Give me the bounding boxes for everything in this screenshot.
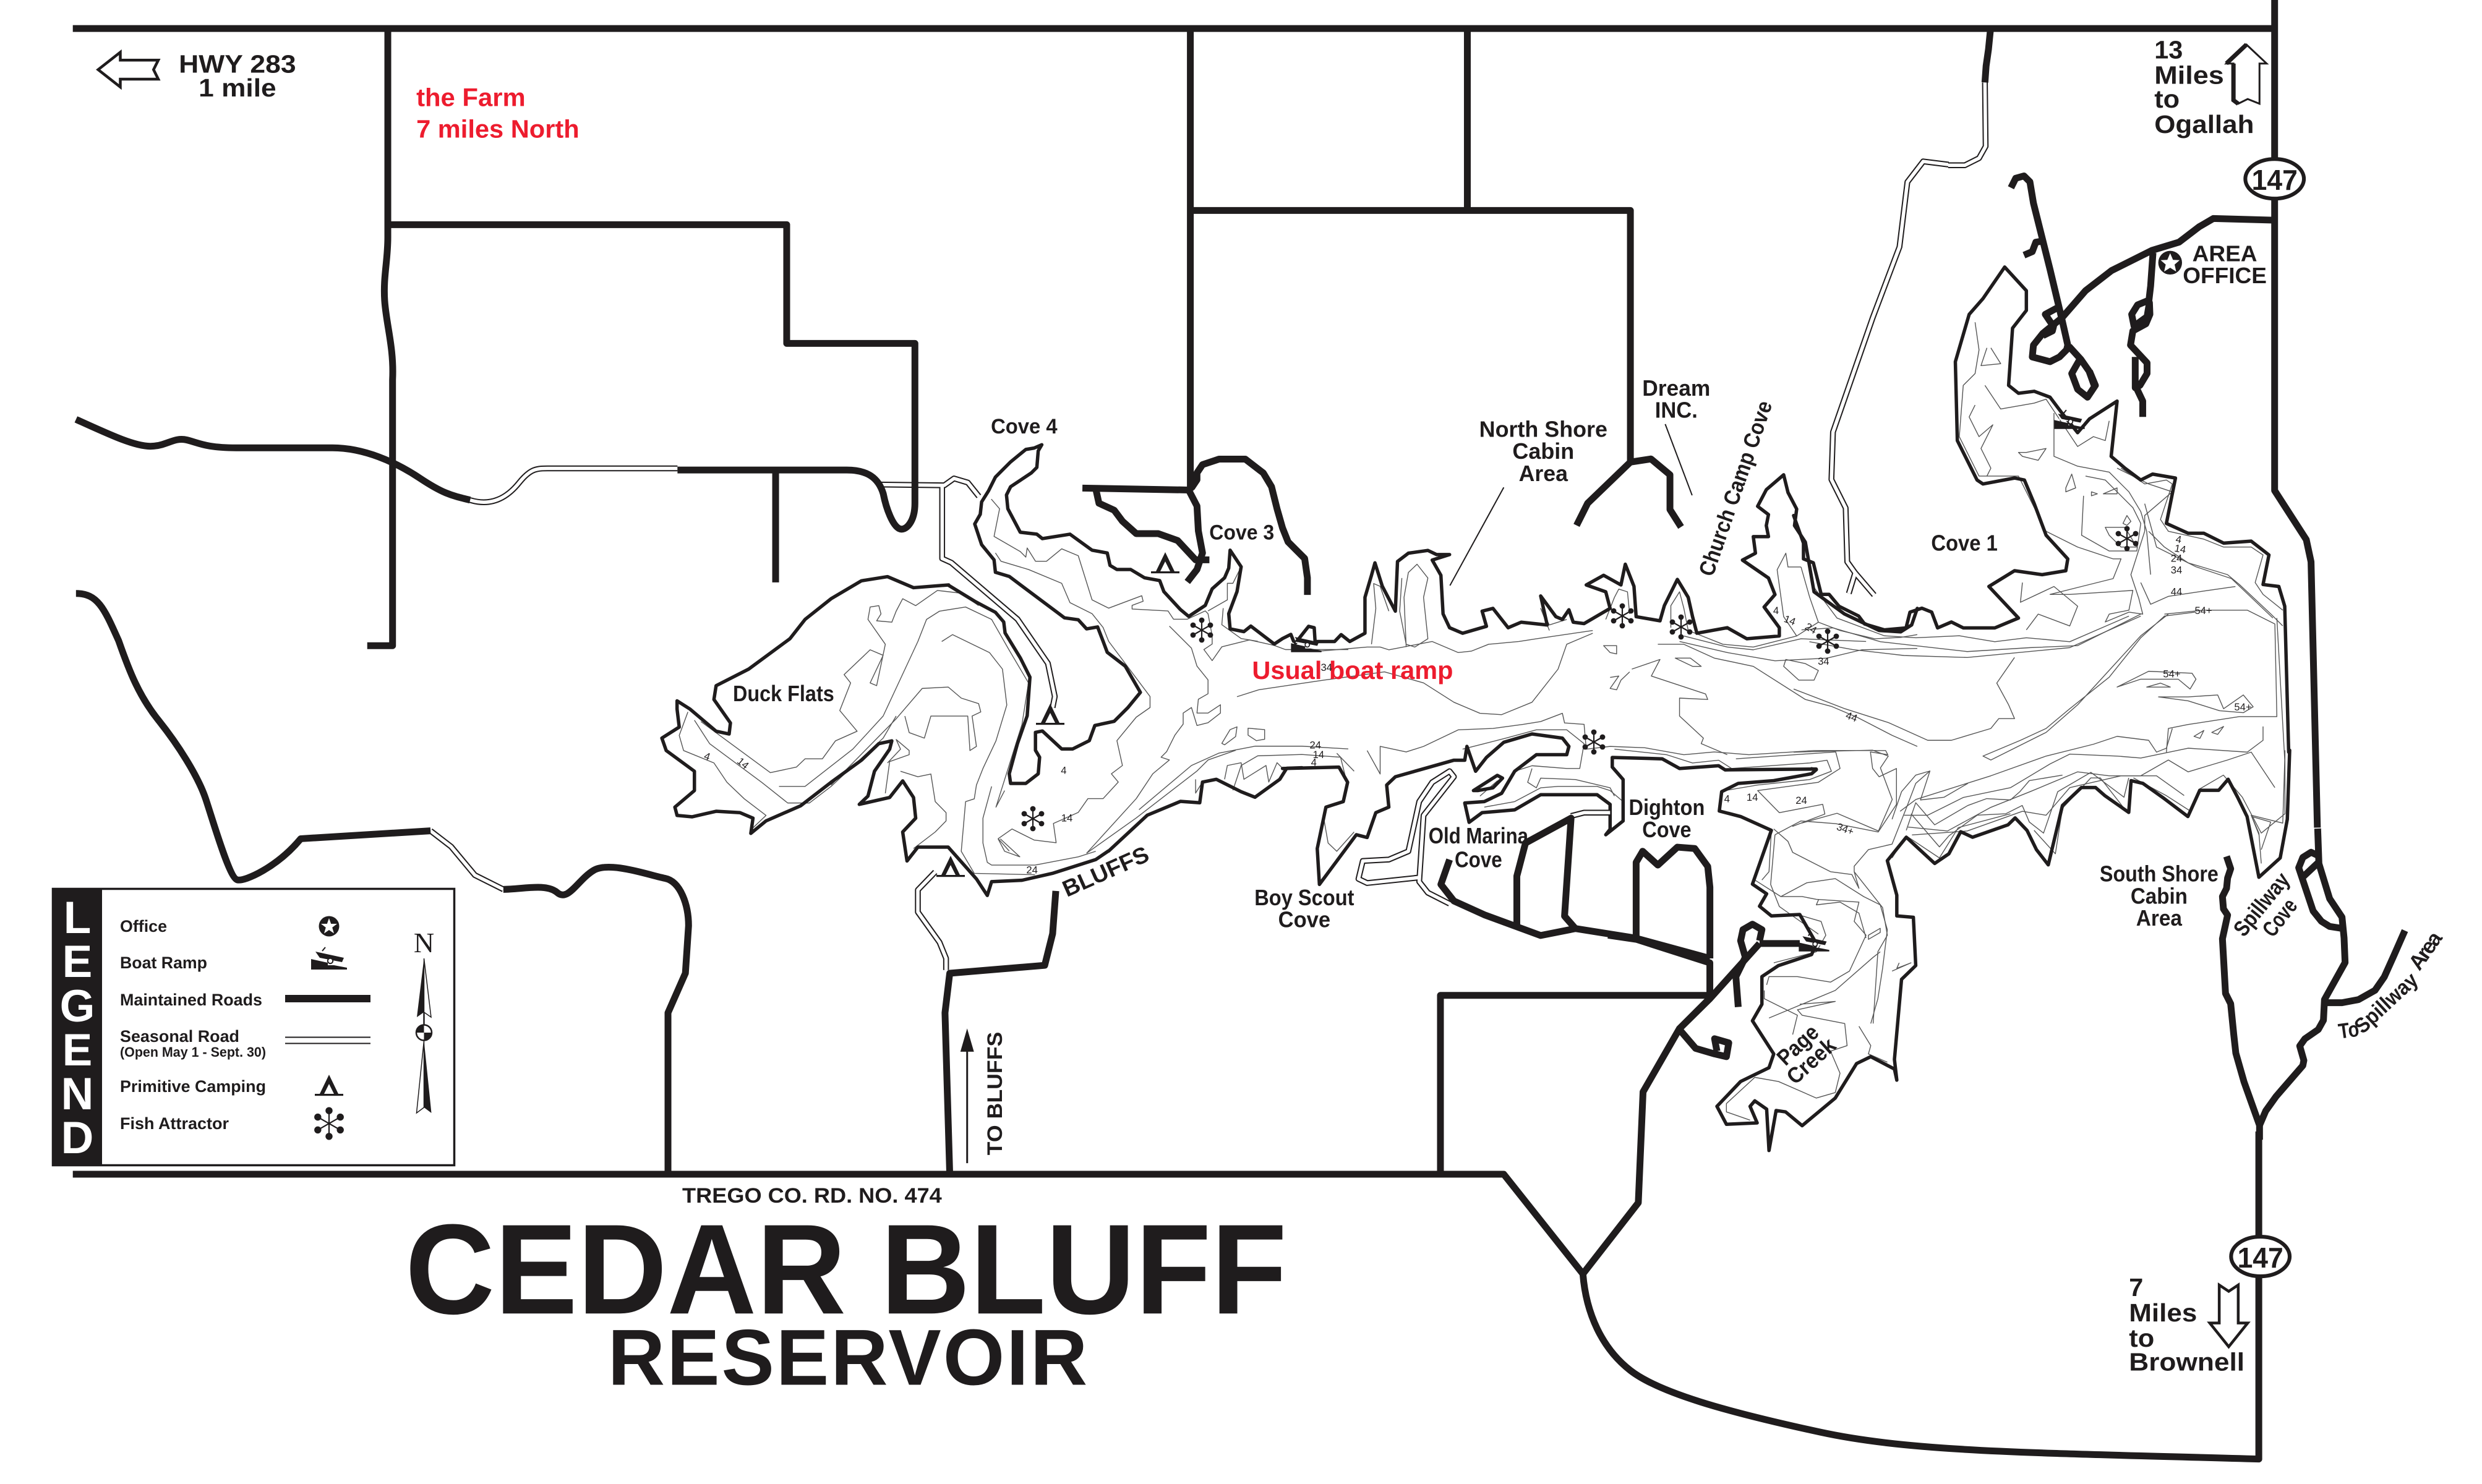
- seasonal roads: western: [430, 161, 1948, 889]
- roads: area office: [1985, 30, 2274, 388]
- depth contours: central basin: [1237, 553, 1917, 934]
- label: South Shore Cabin Area: Area: [2136, 906, 2183, 931]
- depth soundings: 24: [1310, 740, 1321, 751]
- legend heading column: [52, 888, 102, 1166]
- legend: fish attractor: Fish Attractor: [120, 1114, 229, 1133]
- depth soundings: 24: [1795, 795, 1807, 806]
- label: area office: AREA: [2193, 241, 2257, 266]
- depth soundings: 54+: [2163, 668, 2180, 680]
- depth contours: Page Creek and south shore: [1726, 750, 2285, 1120]
- highway sign: 147 south: [2231, 1237, 2290, 1276]
- shoreline: Cove 3, Cove 4 and Duck Flats inner arm: [949, 445, 1302, 851]
- shoreline: Cove 1 and dam: [1794, 267, 2288, 752]
- label: Dighton Cove: [1629, 795, 1705, 842]
- label: Boy Scout Cove: Cove: [1278, 908, 1330, 932]
- label: To Spillway Area: [2337, 927, 2447, 1044]
- legend heading column: D: [61, 1113, 93, 1163]
- label: HWY 283: HWY 283: [179, 50, 296, 79]
- legend: seasonal road: (Open May 1 - Sept. 30): [120, 1044, 266, 1060]
- north arrow: [414, 927, 434, 1113]
- label: HWY 283: 1 mile: [199, 74, 276, 102]
- legend: boat ramp: Boat Ramp: [120, 953, 207, 972]
- highway sign: 147 south: 147: [2238, 1242, 2283, 1274]
- note: the Farm: 7 miles North: [416, 115, 580, 143]
- seasonal road: north of Ogallah road: [1948, 82, 1985, 165]
- label: Spillway Cove: Spillway: [2228, 868, 2295, 941]
- label: South Shore Cabin Area: South Shore: [2100, 862, 2219, 887]
- depth soundings: 4: [1311, 757, 1317, 769]
- lake shoreline: [662, 267, 2290, 1151]
- leader: Dream Inc.: [1665, 424, 1692, 495]
- depth soundings: [703, 533, 2252, 876]
- label: Dream Inc.: INC.: [1655, 398, 1698, 423]
- label: Dream Inc.: [1642, 376, 1710, 423]
- legend: maintained roads: Maintained Roads: [120, 991, 262, 1009]
- depth soundings: 44: [1844, 709, 1859, 724]
- label: Old Marina Cove: [1429, 824, 1529, 872]
- note: the Farm: the Farm: [416, 83, 526, 111]
- label: 13 miles to Ogallah: Miles: [2154, 61, 2224, 90]
- depth soundings: 4: [703, 750, 712, 763]
- label: area office: [2183, 241, 2267, 288]
- depth soundings: 24: [1026, 864, 1038, 876]
- arrow: HWY 283: [98, 52, 158, 87]
- primitive camping icons: [936, 552, 1179, 877]
- note: usual boat ramp: Usual boat ramp: [1252, 656, 1453, 684]
- depth contours: east basin and Cove 1: [1794, 322, 2285, 835]
- label: HWY 283: [179, 50, 296, 102]
- roads: Page Creek: [1608, 924, 1800, 1057]
- boat ramp icons: [1291, 410, 2085, 952]
- legend heading column: E: [62, 937, 92, 987]
- label: Duck Flats: Duck Flats: [733, 681, 834, 706]
- label: area office: OFFICE: [2183, 263, 2267, 288]
- legend: office: [120, 916, 339, 936]
- label: 7 miles to Brownell: 7: [2129, 1273, 2143, 1302]
- note: the Farm: [416, 83, 580, 143]
- legend: seasonal road: Seasonal Road: [120, 1027, 239, 1046]
- depth soundings: 14: [1782, 613, 1797, 628]
- seasonal roads: Boy Scout loop: [1358, 771, 1610, 904]
- depth soundings: 14: [1061, 812, 1072, 824]
- depth soundings: 54+: [2234, 701, 2252, 713]
- legend: primitive camping: [120, 1075, 343, 1096]
- label: to Bluffs: TO BLUFFS: [983, 1032, 1007, 1155]
- label: 7 miles to Brownell: to: [2129, 1324, 2154, 1352]
- fish attractors: [1022, 526, 2138, 831]
- icon: area office star: [2159, 251, 2182, 275]
- label: Cove 3: Cove 3: [1209, 521, 1274, 545]
- legend: seasonal road: [120, 1027, 370, 1060]
- arrow: north to Ogallah: [2227, 45, 2267, 104]
- label: North Shore Cabin Area: North Shore: [1479, 417, 1607, 441]
- label: Page Creek: Page: [1772, 1020, 1823, 1070]
- label: 7 miles to Brownell: Miles: [2129, 1298, 2197, 1327]
- seasonal roads: [430, 82, 1985, 970]
- label: 13 miles to Ogallah: [2154, 36, 2254, 139]
- label: 13 miles to Ogallah: 13: [2154, 36, 2183, 64]
- depth soundings: 14: [1313, 749, 1324, 761]
- depth soundings: 24: [1803, 621, 1819, 636]
- north arrow: N: [414, 927, 434, 958]
- label: Old Marina Cove: Cove: [1455, 847, 1502, 872]
- legend heading column: E: [62, 1025, 92, 1075]
- label: Spillway Cove: Cove: [2257, 894, 2302, 942]
- title: Cedar Bluff: CEDAR BLUFF: [405, 1197, 1287, 1341]
- label: Dighton Cove: Dighton: [1629, 795, 1705, 820]
- label: South Shore Cabin Area: [2100, 862, 2219, 931]
- legend: primitive camping: Primitive Camping: [120, 1077, 266, 1096]
- shoreline: south shore and Page Creek: [1717, 750, 2290, 1151]
- label: North Shore Cabin Area: [1479, 417, 1607, 486]
- legend: maintained roads: [120, 991, 370, 1009]
- arrow: south to Brownell: [2210, 1285, 2248, 1347]
- legend heading column: N: [61, 1069, 93, 1119]
- label: Page Creek: Creek: [1782, 1033, 1841, 1090]
- label: Church Camp Cove: Church Camp Cove: [1694, 398, 1777, 579]
- roads: area office lower loop: [2072, 360, 2142, 417]
- label: 7 miles to Brownell: Brownell: [2129, 1347, 2244, 1376]
- highway sign: 147 north: 147: [2252, 164, 2298, 196]
- label: To Spillway Area: Area: [2404, 927, 2447, 974]
- label: Trego Co. Rd. No. 474: TREGO CO. RD. NO. 474: [682, 1184, 943, 1208]
- legend panel: [52, 888, 454, 1166]
- legend: fish attractor: [120, 1107, 344, 1140]
- depth soundings: 44: [2171, 586, 2182, 597]
- label: Dighton Cove: Cove: [1642, 817, 1692, 842]
- depth contours: west basin: [679, 591, 1096, 875]
- depth soundings: 34: [2171, 565, 2182, 576]
- depth soundings: 34+: [1835, 821, 1855, 838]
- roads: Cove 3 area: [1082, 459, 1307, 595]
- highway sign: 147 north: [2245, 159, 2304, 198]
- roads: Old Marina and Dighton: [1441, 818, 1710, 958]
- label: Bluffs: BLUFFS: [1058, 841, 1153, 902]
- shoreline: north shore and south coves: [1283, 475, 1917, 884]
- legend: boat ramp: [120, 947, 347, 972]
- label: North Shore Cabin Area: Cabin: [1512, 439, 1574, 464]
- label: 13 miles to Ogallah: to: [2154, 85, 2180, 113]
- seasonal road: Duck Flats and Cove 4: [879, 479, 1055, 707]
- roads: Highway 147 south and spillway: [2222, 829, 2405, 1140]
- depth soundings: 4: [2175, 533, 2183, 546]
- seasonal roads: Bluffs spur: [918, 872, 946, 970]
- subtitle: Reservoir: RESERVOIR: [608, 1313, 1087, 1402]
- depth soundings: 4: [1724, 793, 1730, 805]
- label: 7 miles to Brownell: [2129, 1273, 2244, 1376]
- label: South Shore Cabin Area: Cabin: [2131, 884, 2188, 908]
- depth contours: Cove 3 and Cove 4 approach: [991, 499, 1348, 853]
- label: To Spillway Area: Spillway: [2350, 968, 2423, 1038]
- depth soundings: 34: [1320, 662, 1332, 673]
- label: Old Marina Cove: Old Marina: [1429, 824, 1529, 848]
- label: 13 miles to Ogallah: Ogallah: [2154, 110, 2254, 139]
- depth soundings: 14: [735, 755, 751, 772]
- depth soundings: 24: [2171, 553, 2182, 565]
- depth soundings: 34: [1818, 655, 1829, 667]
- label: Boy Scout Cove: [1254, 885, 1354, 932]
- legend heading column: L: [64, 893, 91, 943]
- leader: North Shore: [1450, 487, 1504, 586]
- label: North Shore Cabin Area: Area: [1519, 461, 1568, 486]
- depth soundings: 4: [1061, 764, 1066, 776]
- label: Cove 4: Cove 4: [991, 415, 1058, 438]
- depth soundings: 4: [1773, 605, 1779, 616]
- label: Dream Inc.: Dream: [1642, 376, 1710, 401]
- depth soundings: 14: [2173, 542, 2187, 556]
- label: To Spillway Area: To: [2337, 1018, 2361, 1044]
- arrow: to Bluffs: [962, 1032, 973, 1163]
- legend heading column: G: [60, 981, 95, 1031]
- depth soundings: 54+: [2194, 605, 2212, 616]
- legend: office: Office: [120, 917, 167, 936]
- depth soundings: 14: [1747, 791, 1758, 803]
- shoreline: Duck Flats and Bluffs: [662, 577, 1108, 895]
- label: Boy Scout Cove: Boy Scout: [1254, 885, 1354, 910]
- label: Cove 1: Cove 1: [1931, 531, 1998, 556]
